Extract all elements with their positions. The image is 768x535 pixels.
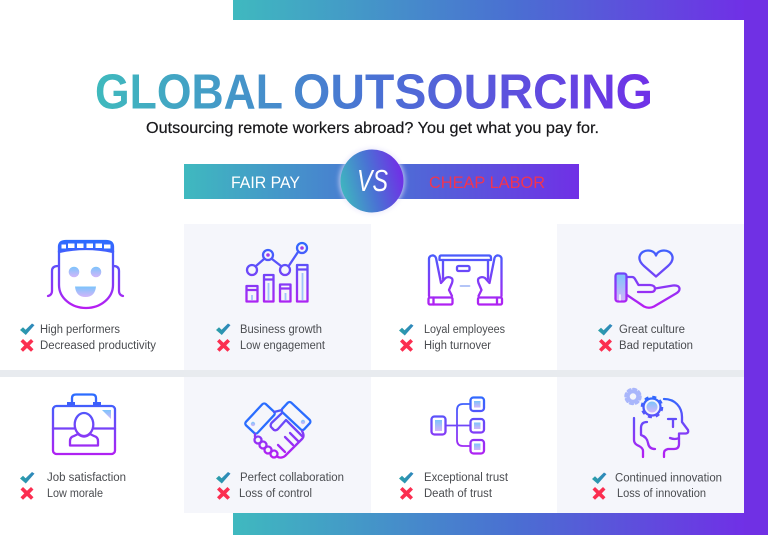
icon: briefcase with person bbox=[53, 394, 115, 454]
icon: smiling face bbox=[48, 241, 123, 308]
title: OUTSOURCING bbox=[293, 66, 653, 120]
text: exceptional trust: Death of trust bbox=[424, 488, 493, 500]
text: continued innovation bbox=[592, 472, 722, 500]
bottom gradient bar bbox=[233, 513, 768, 535]
text: business growth: Business growth bbox=[240, 324, 322, 336]
text: loyal employees: Loyal employees bbox=[424, 324, 505, 336]
right gradient bar bbox=[744, 0, 768, 535]
label: fair pay: FAIR PAY bbox=[231, 173, 300, 192]
label: cheap labor: CHEAP LABOR bbox=[429, 173, 545, 192]
vs badge: VS bbox=[357, 163, 388, 198]
text: exceptional trust bbox=[399, 472, 509, 500]
text: great culture bbox=[598, 324, 693, 352]
icon: handshake bbox=[244, 401, 311, 458]
text: high performers: Decreased productivity bbox=[40, 340, 156, 352]
versus banner bbox=[184, 148, 579, 214]
text: great culture: Great culture bbox=[619, 324, 685, 336]
text: continued innovation: Continued innovation bbox=[615, 472, 722, 484]
text: business growth: Low engagement bbox=[240, 340, 326, 352]
text: job satisfaction bbox=[20, 472, 126, 500]
text: business growth bbox=[216, 324, 326, 352]
text: job satisfaction: Low morale bbox=[47, 488, 103, 500]
icon: head with gears bbox=[626, 389, 688, 457]
subtitle: Outsourcing remote workers abroad? You get what you pay for. bbox=[146, 120, 599, 137]
icon: growth chart bbox=[246, 243, 308, 302]
text: continued innovation: Loss of innovation bbox=[617, 488, 706, 500]
title bbox=[95, 66, 653, 120]
panel: shaded column two bbox=[184, 224, 371, 513]
icon: org chart bbox=[432, 398, 484, 454]
icon: heart in hand bbox=[616, 250, 680, 308]
text: perfect collaboration bbox=[216, 472, 344, 500]
text: great culture: Bad reputation bbox=[619, 340, 693, 352]
banner bar bbox=[184, 164, 579, 199]
icon: hands holding box bbox=[428, 255, 502, 304]
text: job satisfaction: Job satisfaction bbox=[47, 472, 126, 484]
text: loyal employees: High turnover bbox=[424, 340, 491, 352]
text: high performers bbox=[20, 324, 156, 352]
top gradient bar bbox=[233, 0, 768, 20]
text: high performers: High performers bbox=[40, 324, 120, 336]
text: loyal employees bbox=[399, 324, 505, 352]
vs badge bbox=[340, 150, 404, 212]
panel: shaded column four bbox=[557, 224, 744, 513]
title: GLOBAL bbox=[95, 66, 283, 120]
text: exceptional trust: Exceptional trust bbox=[424, 472, 509, 484]
text: perfect collaboration: Loss of control bbox=[239, 488, 312, 500]
text: perfect collaboration: Perfect collaboration bbox=[240, 472, 344, 484]
